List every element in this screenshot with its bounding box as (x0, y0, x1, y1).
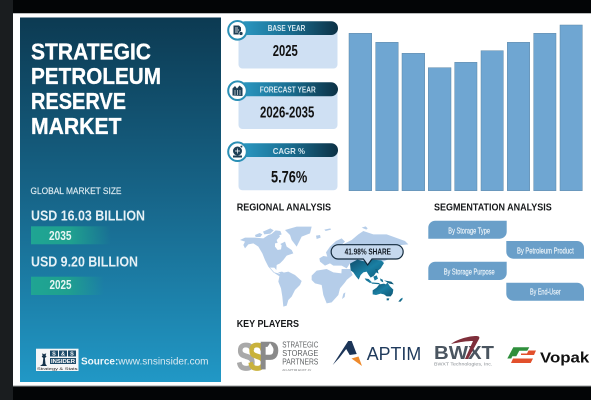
logo: Strategic Storage Partners: S (248, 336, 266, 379)
logo: SNS Insider: S (52, 352, 56, 358)
value: 2025 market size (31, 254, 138, 295)
callout: regional share (331, 245, 403, 265)
segment: by end-user (506, 283, 584, 301)
logo: SNS Insider (36, 349, 78, 371)
logo: SNS Insider: INSIDER (51, 359, 75, 365)
title: STRATEGIC (31, 38, 151, 64)
card: forecast year: 2026-2035 (260, 104, 314, 121)
segment: by storage purpose: By Storage Purpose (444, 266, 495, 276)
logo: SNS Insider: & (61, 352, 65, 358)
card: base year: BASE YEAR (268, 24, 305, 33)
logo: Strategic Storage Partners: PARTNERS (282, 357, 318, 366)
logo: Strategic Storage Partners: P (259, 335, 279, 378)
title: PETROLEUM (31, 63, 161, 89)
logo: Vopak (507, 347, 590, 367)
heading: segmentation analysis: SEGMENTATION ANALYSIS (434, 201, 552, 213)
panel: market summary (20, 18, 221, 382)
value: 2035 market size: USD 16.03 BILLION (31, 208, 145, 225)
logo: APTIM (333, 341, 421, 366)
segment: by storage type (428, 221, 507, 239)
card: CAGR: 5.76% (271, 167, 307, 186)
logo: Strategic Storage Partners: STRATEGIC (282, 341, 318, 350)
heading: regional analysis: REGIONAL ANALYSIS (237, 201, 331, 213)
title: RESERVE (31, 88, 126, 114)
segment: by storage purpose (428, 262, 507, 280)
logo: Strategic Storage Partners: S (236, 336, 256, 379)
logo: Vopak: Vopak (540, 350, 590, 367)
card: CAGR (228, 142, 338, 190)
world map (240, 226, 408, 307)
card: forecast year: FORECAST YEAR (260, 85, 316, 94)
card: CAGR: CAGR % (273, 146, 305, 156)
value: 2025 market size: USD 9.20 BILLION (31, 254, 138, 271)
heading: key players: KEY PLAYERS (237, 318, 299, 330)
segment: by end-user: By End-User (530, 286, 561, 296)
value: 2035 market size (31, 208, 145, 244)
logo: APTIM: APTIM (367, 343, 421, 364)
source line: Source:www.snsinsider.com (81, 355, 209, 367)
title: MARKET (31, 113, 122, 139)
value: 2035 market size: 2035 (49, 229, 72, 243)
card: forecast year (228, 81, 338, 129)
logo: SNS Insider: S (70, 352, 74, 358)
logo: BWXT: BWXT (434, 342, 495, 363)
value: 2025 market size: 2025 (50, 278, 72, 292)
logo: BWXT (434, 336, 495, 367)
callout: regional share: 41.98% SHARE (345, 246, 391, 256)
logo: Strategic Storage Partners: AN APTIM ENXT JV (282, 368, 311, 372)
segment: by petroleum product (506, 241, 584, 259)
logo: SNS Insider: Strategy & Stats (37, 366, 78, 371)
segment: by storage type: By Storage Type (448, 225, 490, 235)
logo: Strategic Storage Partners (236, 335, 318, 379)
icon: chart (228, 81, 247, 100)
title (31, 38, 161, 139)
logo: BWXT: BWXT Technologies, Inc. (434, 362, 492, 367)
global market size label: GLOBAL MARKET SIZE (30, 186, 122, 197)
icon: coins (228, 142, 247, 161)
logo: Strategic Storage Partners: STORAGE (282, 349, 318, 358)
card: base year (228, 21, 338, 68)
icon: document (228, 21, 247, 40)
bar chart (349, 25, 582, 191)
card: base year: 2025 (273, 43, 298, 60)
segment: by petroleum product: By Petroleum Product (517, 245, 574, 255)
